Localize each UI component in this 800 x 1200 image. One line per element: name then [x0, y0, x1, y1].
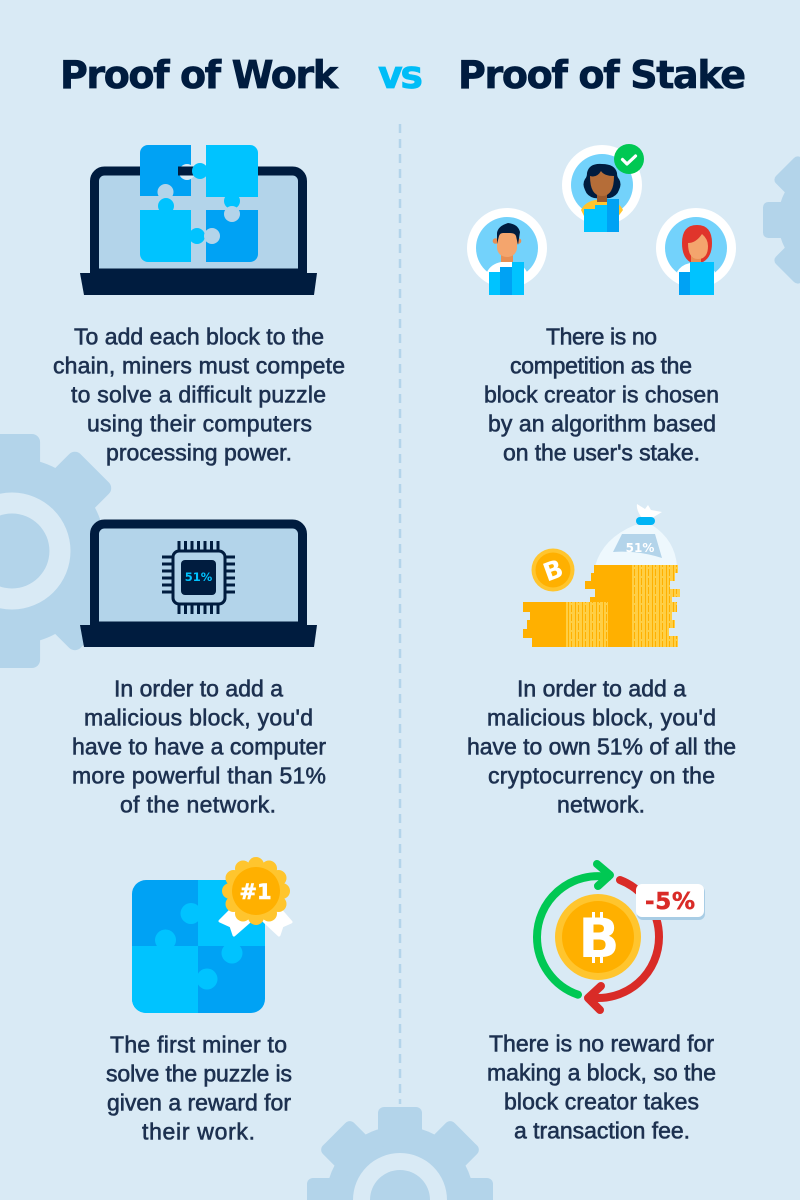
text: transaction fee: making a block, so the [487, 1060, 716, 1086]
icon: coin stacks with 51% bag [523, 504, 680, 647]
medal [220, 857, 291, 935]
avatar: red-haired woman [656, 208, 736, 295]
text: no competition: competition as the [510, 352, 692, 378]
coin stack lower [523, 602, 678, 647]
text: transaction fee: block creator takes [504, 1088, 699, 1114]
green arrow [537, 864, 610, 995]
text: puzzle competition: to solve a difficult puzzle [71, 382, 326, 408]
text: malicious block, stake: network. [557, 792, 645, 818]
text: malicious block, computer [72, 676, 326, 818]
icon: green check badge [614, 144, 644, 174]
text: no competition: block creator is chosen [484, 382, 719, 408]
icon: chip [162, 541, 235, 614]
icon: chip: 51% [185, 570, 213, 584]
text: malicious block, computer: more powerful than 51% [72, 762, 326, 788]
text: malicious block, computer: have to have a computer [72, 734, 326, 760]
badge: -5%: -5% [645, 889, 695, 915]
avatar: woman with check [562, 144, 644, 232]
puzzle piece: bottom left [140, 198, 205, 262]
text: puzzle competition: processing power. [106, 440, 292, 466]
icon: laptop with 51% chip [80, 524, 317, 647]
icon: three stakeholders [467, 144, 736, 295]
medal: #1 [239, 880, 272, 904]
title [60, 53, 746, 97]
badge: -5% [636, 884, 705, 920]
coin [555, 894, 641, 980]
bag: 51% [626, 541, 654, 555]
text: transaction fee [487, 1030, 716, 1144]
heading: vs: vs [378, 53, 423, 97]
puzzle piece: top left [140, 145, 195, 200]
text: puzzle competition: using their computers [87, 410, 312, 436]
text: puzzle competition: chain, miners must compete [53, 352, 345, 378]
decorative gear: bottom [307, 1107, 493, 1200]
text: malicious block, computer: malicious block, you'd [84, 704, 313, 730]
text: no competition: on the user's stake. [503, 440, 700, 466]
decorative gear: left [0, 434, 129, 668]
bag [595, 504, 677, 566]
text: transaction fee: a transaction fee. [514, 1118, 690, 1144]
text: no competition [484, 324, 719, 466]
avatar: man [467, 208, 547, 295]
text: reward for first miner: solve the puzzle is [106, 1060, 292, 1086]
heading: Proof of Stake: Proof of Stake [458, 53, 746, 97]
text: malicious block, computer: of the network. [120, 792, 276, 818]
text: malicious block, computer: In order to add a [114, 676, 283, 702]
text: no competition: There is no [546, 324, 657, 350]
icon: bitcoin fee cycle [537, 864, 705, 1010]
red arrow [588, 880, 659, 1010]
text: malicious block, stake: malicious block, you'd [487, 704, 716, 730]
coin stack upper [585, 565, 680, 602]
puzzle [132, 880, 265, 1013]
icon: bitcoin coin small [532, 548, 574, 592]
coin: B [578, 907, 620, 970]
icon: bitcoin coin small: B [539, 554, 567, 587]
icon: laptop with puzzle [80, 145, 317, 295]
heading: Proof of Work: Proof of Work [60, 53, 339, 97]
text: transaction fee: There is no reward for [489, 1030, 714, 1056]
puzzle piece: top right [192, 145, 258, 209]
text: puzzle competition: To add each block to the [74, 324, 324, 350]
text: reward for first miner: given a reward for [107, 1090, 291, 1116]
text: reward for first miner [106, 1032, 292, 1144]
text: malicious block, stake: have to own 51% of all the [467, 734, 736, 760]
text: puzzle competition [53, 324, 345, 466]
puzzle piece: bottom right [204, 206, 258, 262]
icon: puzzle with medal [132, 857, 291, 1013]
text: reward for first miner: their work. [142, 1118, 255, 1144]
text: malicious block, stake: cryptocurrency on the [488, 762, 715, 788]
decorative gear: right [763, 145, 800, 295]
text: reward for first miner: The first miner to [110, 1032, 287, 1058]
text: malicious block, stake [467, 676, 736, 818]
text: malicious block, stake: In order to add a [517, 676, 686, 702]
text: no competition: by an algorithm based [488, 410, 716, 436]
